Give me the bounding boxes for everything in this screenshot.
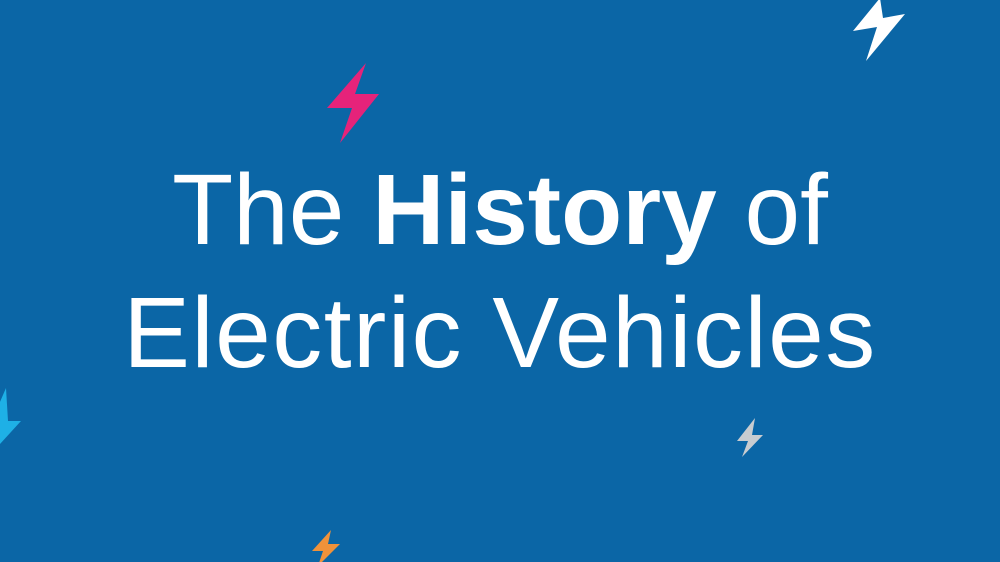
icon: cyan bolt (0, 388, 21, 455)
title line 1: The History of (172, 154, 828, 266)
title line 2: Electric Vehicles (123, 277, 877, 389)
icon: orange bolt (312, 530, 340, 562)
icon: pink bolt (327, 63, 379, 143)
icon: white bolt (853, 0, 905, 61)
icon: gray bolt (737, 418, 763, 457)
